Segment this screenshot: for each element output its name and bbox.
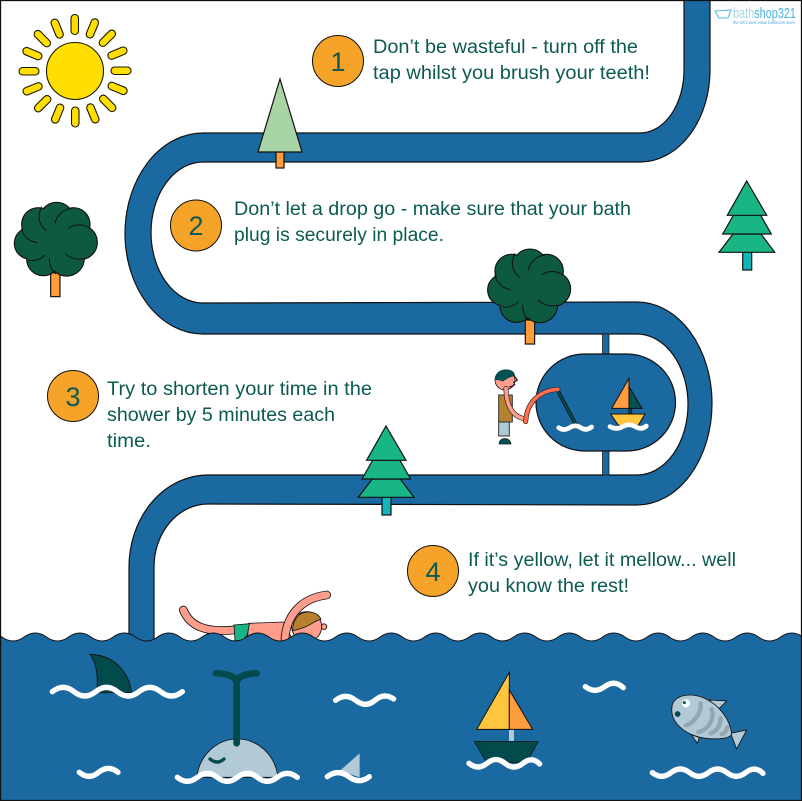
tip 2: plug is securely in place. (234, 225, 444, 246)
icon: sun (19, 14, 131, 127)
teal pine tree on river (358, 426, 414, 515)
logo: bathshop321 (715, 6, 796, 26)
tip 2 (170, 199, 631, 251)
lake boat (610, 378, 646, 428)
tip 1: 1 (330, 47, 346, 77)
tip 4: If it’s yellow, let it mellow... well (468, 550, 736, 571)
waves right (585, 683, 763, 776)
round tree left (14, 202, 97, 297)
tip 2: 2 (188, 211, 204, 241)
tip 3: Try to shorten your time in the (107, 379, 372, 400)
sailboat (469, 672, 540, 767)
tip 1: Don’t be wasteful - turn off the (373, 37, 638, 58)
sea (0, 633, 802, 801)
river (125, 0, 712, 645)
tip 3: 3 (65, 382, 81, 412)
tip 1: tap whilst you brush your teeth! (373, 63, 650, 84)
fisherman (495, 369, 592, 444)
tip 3: shower by 5 minutes each (107, 405, 335, 426)
tip 4 (408, 546, 736, 597)
small fin with wave (327, 753, 369, 781)
fish (672, 695, 747, 749)
lake with connecting channel (536, 334, 676, 475)
round tree on river (488, 249, 571, 344)
whale (177, 673, 297, 781)
shark fin with wave (52, 654, 182, 696)
light green pine tree (258, 79, 302, 168)
tip 3: time. (107, 431, 151, 452)
tip 2: Don’t let a drop go - make sure that your bath (234, 199, 631, 220)
waves left (79, 696, 394, 776)
tip 3 (48, 370, 372, 452)
teal pine tree right (719, 181, 775, 270)
tip 4: you know the rest! (468, 576, 629, 597)
tip 4: 4 (425, 557, 441, 587)
tip 1 (312, 36, 650, 86)
swimmer (183, 595, 327, 642)
